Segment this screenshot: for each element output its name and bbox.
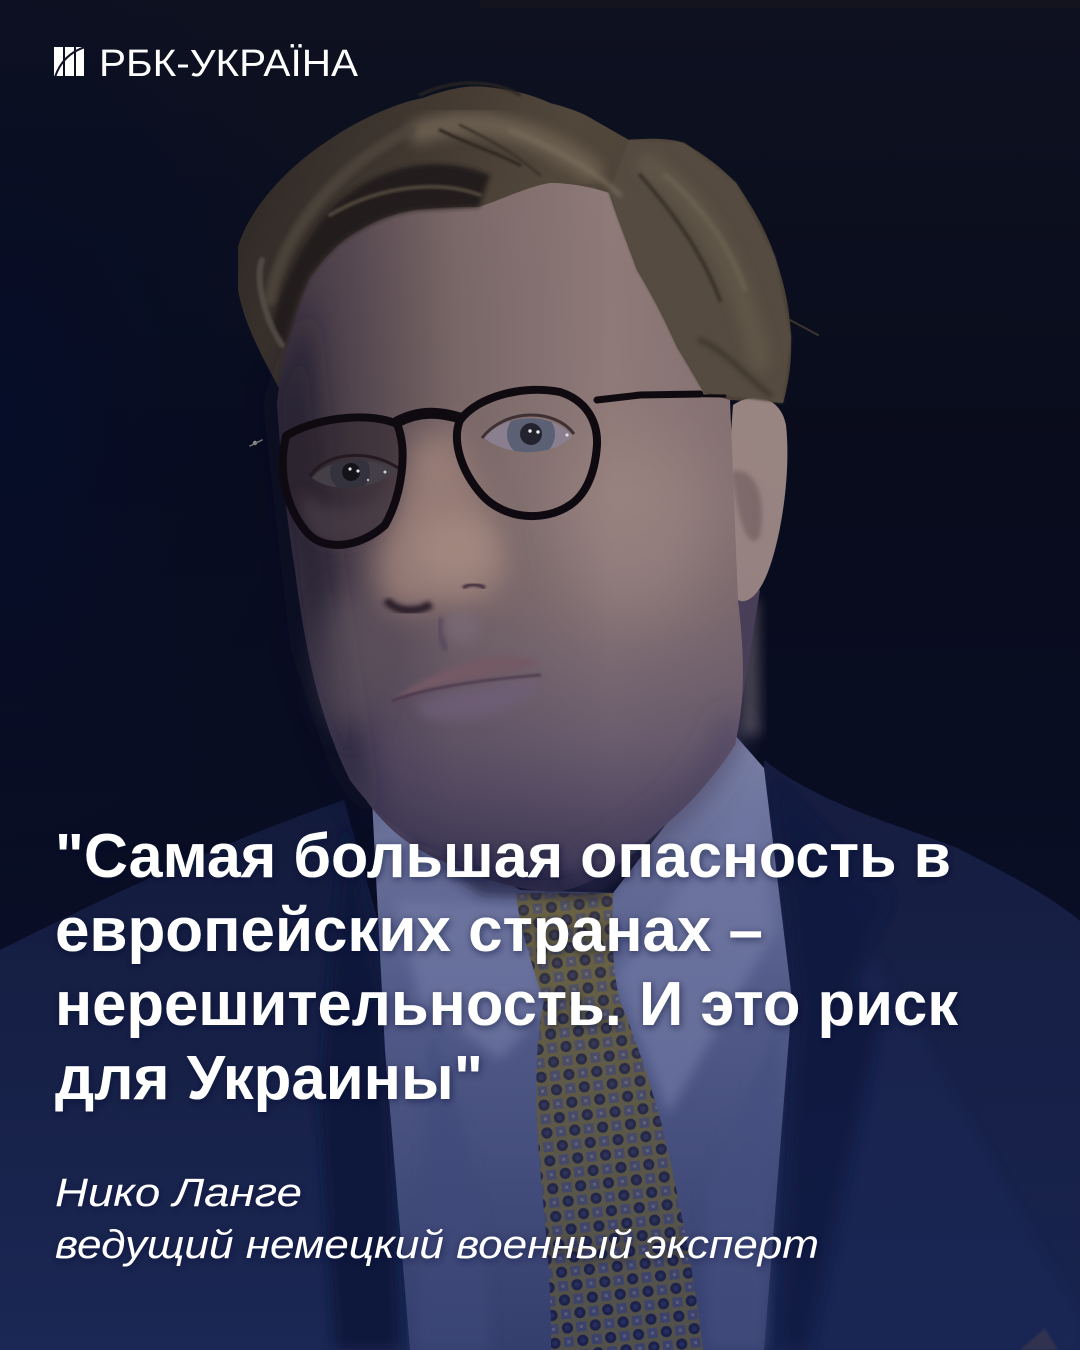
headline quote: "Самая большая опасность в: [55, 822, 951, 891]
hair back: [238, 86, 791, 403]
right hair mass: [609, 140, 791, 403]
jaw shading: [580, 720, 735, 870]
headline quote: нерешительность. И это риск: [55, 970, 959, 1039]
bottom colour fade: [0, 450, 1080, 1350]
left cheek tone: [320, 590, 380, 730]
eye right: [480, 414, 576, 452]
hair at the nape: [738, 600, 760, 735]
glasses: [250, 390, 725, 545]
face: [277, 183, 743, 880]
nose: [377, 430, 506, 650]
left shadow on face: [272, 300, 375, 830]
face vertical shading: [277, 183, 743, 880]
headline quote: европейских странах –: [55, 896, 763, 965]
eye left: [300, 422, 399, 540]
lapel button: [420, 1268, 448, 1296]
logo: [54, 43, 359, 85]
speaker name: Нико Ланге: [55, 1171, 302, 1215]
top highlight: [420, 124, 590, 170]
neck: [330, 590, 760, 892]
left lens shade: [284, 418, 403, 545]
under-chin shadow: [400, 835, 640, 900]
headline quote: для Украины": [55, 1044, 483, 1113]
shirt: [372, 735, 792, 1350]
dark band under parting: [272, 164, 490, 345]
ear: [722, 398, 787, 601]
tie: [516, 893, 703, 1350]
icon: logo mark: [54, 47, 85, 77]
speaker role: ведущий немецкий военный эксперт: [55, 1223, 819, 1267]
logo text: РБК-УКРАЇНА: [99, 43, 359, 85]
cheek highlight: [570, 440, 710, 620]
mouth: [392, 656, 541, 720]
jacket: [0, 760, 1080, 1350]
pocket square: [1020, 1328, 1058, 1350]
headline quote: [55, 822, 959, 1113]
ear shadow: [731, 471, 762, 541]
attribution: [55, 1171, 819, 1267]
hair front: [260, 83, 818, 403]
